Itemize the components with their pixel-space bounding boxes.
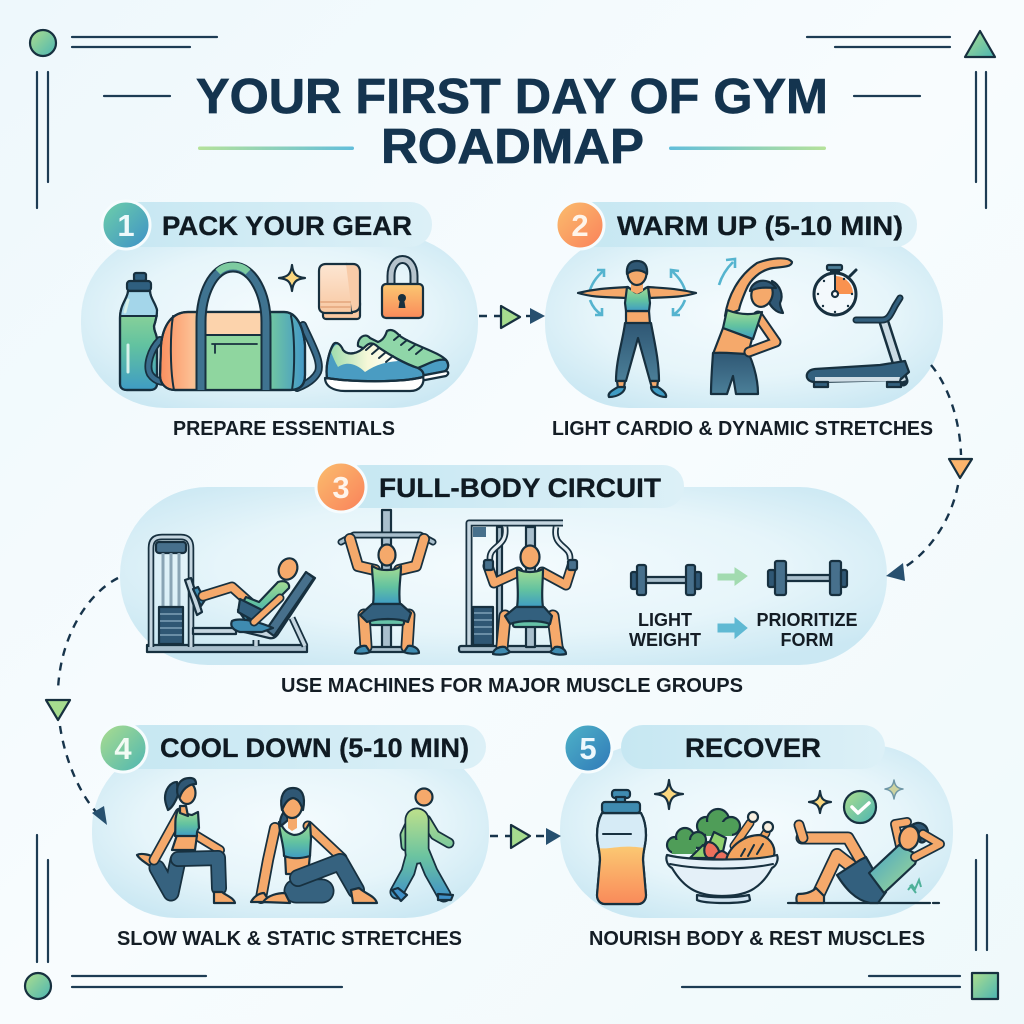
label: light weight: WEIGHT — [629, 630, 701, 650]
caption: SLOW WALK & STATIC STRETCHES — [117, 928, 462, 950]
arrow: step 1 to 2 — [479, 306, 545, 328]
step 5 header pill: RECOVER — [685, 733, 821, 763]
icon: towel — [319, 264, 360, 319]
machine: leg press — [147, 537, 315, 652]
step 5 header pill: 5 — [579, 731, 597, 766]
corner ornament: bottom right — [682, 835, 998, 999]
icon: treadmill — [807, 298, 909, 387]
panel: step 5 recover — [560, 724, 953, 950]
icon: recovery shake bottle — [597, 790, 646, 904]
figure: kneeling stretch — [137, 778, 235, 903]
title — [104, 70, 920, 174]
figure: slow walk — [392, 788, 453, 901]
icon: stopwatch — [814, 265, 856, 315]
step 3 header pill: 3 — [332, 470, 350, 505]
corner ornament: top left — [30, 30, 217, 208]
step 4 header pill: 4 — [114, 731, 132, 766]
figure: side stretch — [711, 258, 792, 394]
label: prioritize form: PRIORITIZE — [756, 610, 858, 630]
caption: NOURISH BODY & REST MUSCLES — [589, 928, 925, 950]
icon: light weight dumbbell — [631, 565, 701, 595]
icon: gym duffel bag — [148, 266, 319, 390]
panel: step 4 cool down — [92, 724, 489, 950]
step 1 header pill: 1 — [117, 208, 135, 243]
arrow: blue — [718, 618, 747, 638]
panel: step 3 full-body circuit — [120, 462, 887, 665]
label: light weight: LIGHT — [638, 610, 692, 630]
caption: step 3: USE MACHINES FOR MAJOR MUSCLE GROUPS — [281, 675, 743, 697]
machine: lat pulldown — [341, 510, 433, 654]
title: YOUR FIRST DAY OF GYM — [196, 70, 828, 124]
icon: sparkle — [655, 780, 683, 809]
icon: water bottle — [120, 273, 157, 390]
step 2 header pill: 2 — [571, 208, 589, 243]
caption: LIGHT CARDIO & DYNAMIC STRETCHES — [552, 418, 933, 440]
figure: arm circles — [578, 261, 696, 397]
arrow: step 3 to 4 — [46, 578, 118, 825]
step 4 header pill — [99, 724, 486, 772]
arrow: green — [718, 568, 747, 585]
arrow: step 2 to 3 — [886, 365, 972, 581]
icon: running shoes — [325, 330, 448, 391]
caption: PREPARE ESSENTIALS — [173, 418, 395, 440]
step 4 header pill: COOL DOWN (5-10 MIN) — [160, 733, 469, 763]
title: ROADMAP — [381, 120, 644, 174]
panel: step 2 warm up — [545, 201, 943, 440]
step 1 header pill — [102, 201, 432, 249]
icon: sparkles and check — [809, 780, 903, 823]
machine: chest press — [459, 523, 577, 655]
step 3 header pill: FULL-BODY CIRCUIT — [379, 473, 662, 503]
step 3 header pill — [316, 462, 684, 512]
figure: seated twist — [251, 788, 377, 903]
icon: padlock — [382, 260, 423, 318]
corner ornament: bottom left — [25, 835, 342, 999]
corner ornament: top right — [807, 31, 995, 208]
icon: form dumbbell — [768, 561, 847, 595]
step 2 header pill — [556, 201, 917, 249]
label: prioritize form: FORM — [780, 630, 834, 650]
step 2 header pill: WARM UP (5-10 MIN) — [617, 211, 903, 241]
icon: salad bowl — [666, 809, 778, 903]
panel: step 1 pack your gear — [81, 201, 478, 440]
step 1 header pill: PACK YOUR GEAR — [162, 211, 412, 241]
figure: resting person — [788, 822, 940, 903]
arrow: step 4 to 5 — [490, 825, 561, 848]
step 5 header pill — [564, 724, 885, 772]
icon: sparkle — [279, 265, 305, 291]
